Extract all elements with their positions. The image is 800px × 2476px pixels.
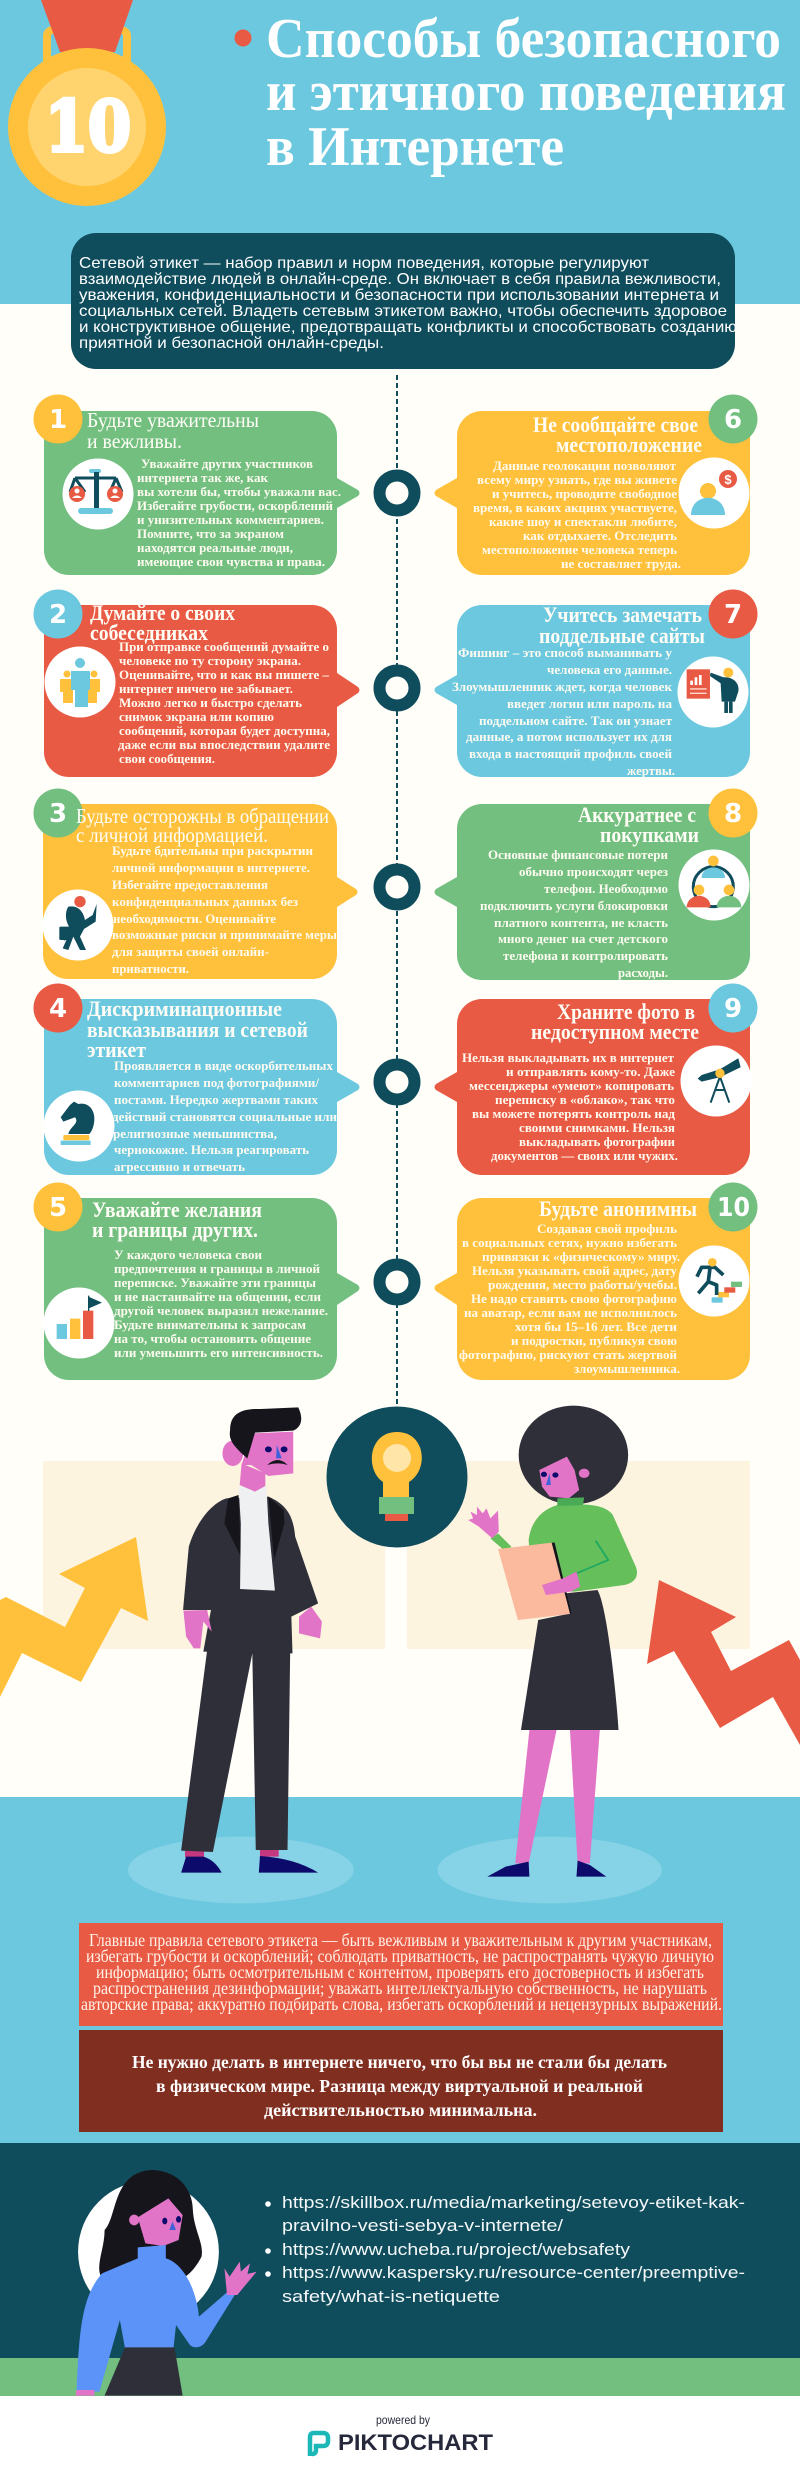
panel: card 9 photos bbox=[434, 984, 758, 1175]
panel: main rules: избегать грубости и оскорблений; соблюдать приватность, не распространять чужую личную bbox=[86, 1946, 714, 1966]
text block 8: телефон. Необходимо bbox=[544, 882, 668, 896]
icon: chess knight bbox=[44, 1090, 114, 1162]
icon: person with dollar bbox=[678, 458, 750, 528]
text block 7: человека его данные. bbox=[547, 663, 672, 677]
text block 8: расходы. bbox=[618, 966, 668, 980]
icon: man running up stairs bbox=[678, 1246, 750, 1316]
heading 8: покупками bbox=[600, 822, 699, 847]
text block 3: необходимости. Оценивайте bbox=[113, 912, 276, 926]
icon: person with dollar: $ bbox=[724, 472, 732, 487]
badge 4 bbox=[34, 984, 82, 1032]
heading 3 bbox=[76, 804, 329, 847]
text block 8: подключить услуги блокировки bbox=[480, 899, 668, 913]
text block 5: или уменьшить его интенсивность. bbox=[114, 1346, 323, 1360]
badge 6 bbox=[708, 394, 758, 444]
text block 2: сообщений, которая будет доступна, bbox=[119, 724, 330, 738]
text block 6: как отдыхаете. Отследить bbox=[523, 529, 677, 543]
text block 2 bbox=[118, 640, 330, 766]
heading 10: Будьте анонимны bbox=[539, 1196, 697, 1221]
heading 7: Учитесь замечать bbox=[543, 602, 702, 627]
text block 9: мессенджеры «умеют» копировать bbox=[469, 1079, 674, 1093]
text block 10 bbox=[459, 1222, 680, 1376]
icon: telescope bbox=[680, 1046, 752, 1116]
text block 7: входа в настоящий профиль своей bbox=[469, 747, 672, 761]
text block 3: Избегайте предоставления bbox=[112, 878, 268, 892]
icon: walking man bbox=[42, 890, 114, 960]
text block 5: на то, чтобы остановить общение bbox=[114, 1332, 311, 1346]
title bbox=[234, 8, 786, 178]
text block 3: приватности. bbox=[112, 962, 189, 976]
heading 1: и вежливы. bbox=[87, 429, 182, 453]
heading 5: Уважайте желания bbox=[92, 1197, 262, 1222]
text block 6: время, в каких акциях участвуете, bbox=[473, 501, 677, 515]
text block 1: интернета так же, как bbox=[137, 471, 269, 485]
text block 2: даже если вы впоследствии удалите bbox=[118, 738, 330, 752]
badge 1: 1 bbox=[49, 405, 67, 435]
heading 8 bbox=[578, 802, 699, 847]
panel: card 8 purchases bbox=[434, 788, 758, 980]
background panels behind characters bbox=[43, 1461, 750, 1649]
text block 3: для защиты своей онлайн- bbox=[112, 945, 269, 959]
arrow: red bbox=[647, 1580, 800, 1745]
panel: card 5 boundaries bbox=[34, 1182, 360, 1380]
panel: main rules bbox=[79, 1923, 723, 2026]
text block 5: другой человек выразил нежелание. bbox=[114, 1304, 328, 1318]
text block 8: обычно происходят через bbox=[519, 865, 668, 879]
list of sources: https://www.ucheba.ru/project/websafety bbox=[282, 2240, 631, 2259]
badge 5: 5 bbox=[49, 1193, 67, 1223]
intro text panel: приятной и безопасной онлайн-среды. bbox=[79, 335, 384, 352]
text block 4: агрессивно и отвечать bbox=[114, 1160, 245, 1174]
text block 3: конфиденциальных данных без bbox=[112, 895, 298, 909]
text block 3: возможные риски и принимайте меры bbox=[112, 928, 337, 942]
icon: medal with number 10: 10 bbox=[45, 85, 131, 168]
text block 9: Нельзя выкладывать их в интернет bbox=[462, 1051, 674, 1065]
heading 8: Аккуратнее с bbox=[578, 802, 696, 827]
illustration: woman with tablet bbox=[438, 1406, 662, 1903]
text block 10: рождения, место работы/учебы. bbox=[488, 1278, 677, 1292]
panel: main rules: авторские права; аккуратно подбирать слова, избегать оскорблений и нецензурных выражений. bbox=[81, 1994, 722, 2014]
text block 1: Избегайте грубости, оскорблений bbox=[137, 499, 333, 513]
text block 5: предпочтения и границы в личной bbox=[114, 1262, 320, 1276]
intro text panel: взаимодействие людей в онлайн-среде. Он включает в себя правила вежливости, bbox=[79, 271, 721, 288]
footer: Piktochart credit bbox=[310, 2413, 494, 2456]
icon: group of people bbox=[44, 646, 116, 718]
text block 4: религиозные меньшинства, bbox=[113, 1127, 277, 1141]
text block 2: свои сообщения. bbox=[119, 752, 215, 766]
text block 10: фотографию, рискуют стать жертвой bbox=[459, 1348, 677, 1362]
heading 4: Дискриминационные bbox=[87, 996, 282, 1021]
badge 6: 6 bbox=[724, 405, 742, 435]
text block 8: Основные финансовые потери bbox=[488, 848, 668, 862]
text block 5: Будьте внимательны к запросам bbox=[114, 1318, 306, 1332]
heading 2: Думайте о своих bbox=[90, 600, 235, 625]
text block 6: Данные геолокации позволяют bbox=[493, 459, 676, 473]
list of sources bbox=[265, 2193, 745, 2306]
intro text panel bbox=[71, 233, 737, 369]
panel: main rules: Главные правила сетевого этикета — быть вежливым и уважительным к другим участникам, bbox=[89, 1930, 712, 1950]
text block 6: и учитесь, проводите свободное bbox=[492, 487, 677, 501]
text block 5: и не настаивайте на общении, если bbox=[114, 1290, 321, 1304]
heading 9: Храните фото в bbox=[557, 999, 695, 1024]
text block 9: выкладывать фотографии bbox=[519, 1135, 675, 1149]
heading 7: поддельные сайты bbox=[539, 623, 705, 648]
text block 4: чернокожие. Нельзя реагировать bbox=[114, 1143, 309, 1157]
heading 1 bbox=[87, 408, 259, 453]
text block 3: личной информации в интернете. bbox=[112, 861, 310, 875]
heading 3: с личной информацией. bbox=[76, 823, 268, 847]
badge 4: 4 bbox=[49, 994, 67, 1024]
title: и этичного поведения bbox=[266, 61, 786, 123]
text block 1: Уважайте других участников bbox=[141, 457, 313, 471]
title: Способы безопасного bbox=[266, 8, 781, 70]
panel: closing note: действительностью минимальна. bbox=[264, 2100, 537, 2120]
heading 6: Не сообщайте свое bbox=[533, 412, 698, 437]
text block 2: Оценивайте, что и как вы пишете – bbox=[119, 668, 330, 682]
text block 9: документов — своих или чужих. bbox=[491, 1149, 678, 1163]
heading 1: Будьте уважительны bbox=[87, 408, 259, 432]
text block 8: много денег на счет детского bbox=[498, 932, 668, 946]
footer: Piktochart credit: powered by bbox=[376, 2413, 430, 2427]
badge 10: 10 bbox=[717, 1193, 750, 1223]
text block 8: платного контента, не класть bbox=[494, 916, 668, 930]
text block 2: При отправке сообщений думайте о bbox=[119, 640, 329, 654]
title: в Интернете bbox=[266, 116, 564, 178]
text block 1: и унизительных комментариев. bbox=[137, 513, 324, 527]
heading 2: собеседниках bbox=[90, 620, 208, 645]
text block 5: переписке. Уважайте эти границы bbox=[114, 1276, 316, 1290]
heading 9 bbox=[531, 999, 699, 1044]
badge 5 bbox=[34, 1182, 82, 1232]
icon: presenter with chart bbox=[678, 656, 748, 728]
text block 10: хотя бы 15–16 лет. Все дети bbox=[515, 1320, 677, 1334]
text block 6 bbox=[473, 459, 681, 571]
text block 2: человеке по ту сторону экрана. bbox=[119, 654, 301, 668]
panel: card 4 discrimination bbox=[34, 984, 360, 1175]
text block 9: своими снимками. Нельзя bbox=[519, 1121, 675, 1135]
panel: card 10 anonymity bbox=[434, 1182, 758, 1380]
badge 9 bbox=[708, 984, 758, 1032]
illustration: man in suit bbox=[128, 1407, 354, 1903]
text block 7: данные, а потом использует их для bbox=[466, 730, 672, 744]
intro text panel: социальных сетей. Владеть сетевым этикетом важно, чтобы обеспечить здоровое bbox=[79, 303, 727, 320]
badge 2: 2 bbox=[49, 600, 67, 630]
text block 10: Не надо ставить свою фотографию bbox=[471, 1292, 677, 1306]
icon: light bulb bbox=[326, 1406, 468, 1548]
text block 10: Нельзя указывать свой адрес, дату bbox=[472, 1264, 678, 1278]
text block 4: действий становятся социальные или bbox=[112, 1110, 337, 1124]
text block 8 bbox=[480, 848, 668, 980]
text block 3 bbox=[112, 844, 337, 976]
badge 8: 8 bbox=[724, 799, 742, 829]
text block 9 bbox=[462, 1051, 678, 1163]
intro text panel: уважения, конфиденциальности и безопасности при использовании интернета и bbox=[79, 287, 719, 304]
text block 10: злоумышленника. bbox=[574, 1362, 680, 1376]
text block 10: и подростки, публикуя свою bbox=[511, 1334, 677, 1348]
dashed timeline bbox=[396, 375, 398, 1410]
text block 4: Проявляется в виде оскорбительных bbox=[114, 1059, 334, 1073]
badge 8 bbox=[708, 788, 758, 838]
text block 6: всему миру узнать, где вы живете bbox=[477, 473, 677, 487]
text block 2: Можно легко и быстро сделать bbox=[119, 696, 302, 710]
list of sources: https://www.kaspersky.ru/resource-center/preemptive- bbox=[282, 2263, 745, 2282]
badge 10 bbox=[708, 1182, 758, 1232]
text block 2: интернет ничего не забывает. bbox=[119, 682, 293, 696]
text block 6: не составляет труда. bbox=[561, 557, 681, 571]
text block 5: У каждого человека свои bbox=[114, 1248, 262, 1262]
text block 7: жертвы. bbox=[627, 764, 675, 778]
text block 6: какие шоу и спектакли любите, bbox=[489, 515, 677, 529]
text block 1: находятся реальные люди, bbox=[137, 541, 293, 555]
heading 4: этикет bbox=[87, 1037, 146, 1062]
text block 2: снимок экрана или копию bbox=[119, 710, 274, 724]
badge 1 bbox=[34, 394, 82, 444]
arrow: yellow bbox=[0, 1537, 148, 1697]
text block 1: вы хотели бы, чтобы уважали вас. bbox=[137, 485, 341, 499]
text block 3: Будьте бдительны при раскрытии bbox=[112, 844, 313, 858]
panel: card 2 think bbox=[34, 590, 360, 777]
text block 4 bbox=[112, 1059, 337, 1174]
panel: card 3 personal data bbox=[34, 788, 358, 979]
panel: closing note: в физическом мире. Разница между виртуальной и реальной bbox=[156, 2076, 643, 2096]
text block 9: переписку в «облако», так что bbox=[495, 1093, 675, 1107]
text block 9: вы можете потерять контроль над bbox=[472, 1107, 676, 1121]
text block 10: на аватар, если вам не исполнилось bbox=[464, 1306, 677, 1320]
heading 3: Будьте осторожны в обращении bbox=[76, 804, 329, 828]
heading 4 bbox=[87, 996, 308, 1062]
panel: card 1 respect bbox=[34, 394, 360, 575]
intro text panel: и конструктивное общение, предотвращать конфликты и способствовать созданию bbox=[79, 319, 737, 336]
heading 5: и границы других. bbox=[92, 1217, 258, 1242]
heading 4: высказывания и сетевой bbox=[87, 1017, 308, 1042]
heading 7 bbox=[539, 602, 705, 648]
text block 7: Злоумышленник ждет, когда человек bbox=[452, 680, 673, 694]
badge 3: 3 bbox=[49, 799, 67, 829]
illustration: woman presenting sources bbox=[76, 2170, 257, 2396]
list of sources: safety/what-is-netiquette bbox=[282, 2287, 500, 2306]
text block 7: поддельном сайте. Так он узнает bbox=[479, 714, 672, 728]
heading 6: местоположение bbox=[556, 432, 702, 457]
list of sources: pravilno-vesti-sebya-v-internete/ bbox=[282, 2216, 563, 2235]
text block 10: в социальных сетях, нужно избегать bbox=[462, 1236, 677, 1250]
panel: card 7 fake sites bbox=[434, 590, 758, 778]
panel: closing note bbox=[79, 2030, 723, 2132]
text block 1 bbox=[137, 457, 341, 569]
heading 9: недоступном месте bbox=[531, 1019, 699, 1044]
footer: Piktochart credit: PIKTOCHART bbox=[338, 2430, 494, 2455]
panel: card 6 location bbox=[434, 394, 758, 575]
text block 4: постами. Нередко жертвами таких bbox=[114, 1093, 319, 1107]
text block 5 bbox=[114, 1248, 328, 1360]
list of sources: https://skillbox.ru/media/marketing/setevoy-etiket-kak- bbox=[282, 2193, 745, 2212]
icon: medal with number 10 bbox=[8, 0, 166, 206]
panel: closing note: Не нужно делать в интернете ничего, что бы вы не стали бы делать bbox=[132, 2052, 667, 2072]
badge 2 bbox=[34, 590, 82, 638]
text block 6: местоположение человека теперь bbox=[482, 543, 677, 557]
intro text panel: Сетевой этикет — набор правил и норм поведения, которые регулируют bbox=[79, 255, 650, 272]
text block 10: Создавая свой профиль bbox=[537, 1222, 677, 1236]
heading 2 bbox=[90, 600, 235, 645]
heading 5 bbox=[92, 1197, 262, 1242]
text block 7 bbox=[452, 646, 675, 778]
badge 7: 7 bbox=[724, 600, 742, 630]
text block 9: и отправлять кому-то. Даже bbox=[506, 1065, 675, 1079]
heading 6 bbox=[533, 412, 702, 457]
badge 3 bbox=[34, 788, 82, 838]
text block 10: привязки к «физическому» миру. bbox=[482, 1250, 680, 1264]
panel: main rules: информацию; быть осмотрительным с контентом, проверять его достоверность и избегать bbox=[96, 1962, 704, 1982]
icon: scales bbox=[62, 458, 134, 530]
text block 1: имеющие свои чувства и права. bbox=[137, 555, 325, 569]
text block 1: Помните, что за экраном bbox=[137, 527, 284, 541]
timeline nodes bbox=[380, 476, 414, 1300]
icon: network of people bbox=[678, 850, 750, 920]
text block 7: Фишинг – это способ выманивать у bbox=[458, 646, 673, 660]
icon: bar chart with flag bbox=[44, 1288, 114, 1358]
text block 4: комментариев под фотографиями/ bbox=[114, 1076, 320, 1090]
badge 7 bbox=[708, 590, 758, 638]
panel: main rules: распространения дезинформации; уважать интеллектуальную собственность, не нарушать bbox=[93, 1978, 707, 1998]
text block 7: введет логин или пароль на bbox=[507, 697, 673, 711]
text block 8: телефона и контролировать bbox=[503, 949, 668, 963]
badge 9: 9 bbox=[724, 994, 742, 1024]
